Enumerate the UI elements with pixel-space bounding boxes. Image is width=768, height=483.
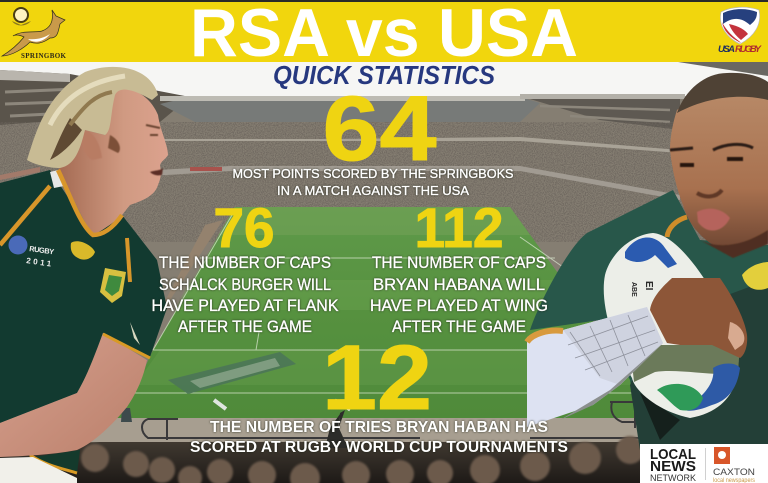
roof centre bbox=[160, 97, 540, 122]
player right: Bryan Habana: ABE bbox=[630, 282, 637, 297]
crowd bbox=[0, 430, 768, 483]
sleeve hem bbox=[103, 334, 150, 358]
stat: 76 caps: SCHALCK BURGER WILL bbox=[159, 276, 331, 294]
umpire silhouettes bbox=[121, 408, 132, 422]
cuff bbox=[527, 331, 563, 342]
pitch logo bbox=[168, 352, 296, 394]
header band bbox=[0, 0, 768, 62]
icon: rwc 2011 badge bbox=[8, 236, 55, 269]
collar bbox=[58, 170, 122, 235]
stat: 112 caps: 112 bbox=[414, 196, 504, 259]
logo: local news network and caxton: LOCAL bbox=[650, 446, 696, 463]
hand bbox=[650, 278, 747, 358]
arm bbox=[0, 333, 147, 457]
tier bands bbox=[160, 137, 680, 153]
stat: 112 caps: AFTER THE GAME bbox=[392, 318, 526, 336]
stat: 76 caps: THE NUMBER OF CAPS bbox=[159, 254, 331, 272]
icon: USA rugby logo: USA bbox=[718, 44, 735, 55]
jersey bbox=[0, 170, 167, 423]
head bbox=[670, 88, 768, 255]
collar bbox=[667, 217, 687, 237]
jersey bbox=[530, 190, 768, 483]
stat: 12 tries: THE NUMBER OF TRIES BRYAN HABAN HAS bbox=[210, 419, 548, 436]
ball text: EI bbox=[643, 281, 654, 291]
sleeve bbox=[527, 307, 663, 427]
logo: local news network and caxton: NEWS bbox=[650, 458, 696, 475]
stat: 112 caps: THE NUMBER OF CAPS bbox=[372, 254, 546, 272]
icon: USA rugby logo bbox=[718, 7, 763, 55]
icon: springbok crest bbox=[100, 268, 126, 303]
stat: 12 tries: 12 bbox=[322, 327, 432, 429]
stat: 64: MOST POINTS SCORED BY THE SPRINGBOKS bbox=[232, 167, 514, 181]
stands bbox=[0, 72, 768, 430]
stat: 64: 64 bbox=[322, 78, 436, 180]
player right: Bryan Habana bbox=[527, 73, 768, 483]
logo: local news network and caxton bbox=[640, 444, 768, 483]
stat: 76 caps: 76 bbox=[214, 196, 274, 259]
concrete walkway bbox=[60, 418, 660, 445]
stat: 12 tries bbox=[190, 327, 568, 456]
stat: 112 caps: HAVE PLAYED AT WING bbox=[370, 297, 548, 315]
canterbury logo bbox=[742, 262, 768, 290]
hair bbox=[677, 73, 768, 113]
logo: local news network and caxton: CAXTON bbox=[713, 467, 755, 477]
logo: local news network and caxton: NETWORK bbox=[650, 473, 696, 483]
stat: 112 caps: BRYAN HABANA WILL bbox=[373, 276, 545, 294]
pitch side strip bbox=[155, 220, 223, 320]
icon: USA rugby logo: RUGBY bbox=[735, 44, 763, 55]
roof left bbox=[0, 70, 190, 125]
facial features bbox=[670, 144, 753, 150]
icon: springbok logo bbox=[2, 8, 67, 60]
top right roof corner bbox=[678, 62, 768, 76]
white collar bbox=[50, 170, 64, 188]
roof right bbox=[520, 94, 680, 130]
icon: rwc 2011 badge: RUGBY bbox=[29, 244, 55, 256]
stat: 76 caps bbox=[152, 196, 338, 336]
pitchside flags bbox=[214, 400, 226, 409]
stat: 76 caps: AFTER THE GAME bbox=[178, 318, 312, 336]
rugby ball bbox=[604, 233, 739, 418]
icon: springbok logo: SPRINGBOK bbox=[21, 52, 67, 60]
hair bbox=[27, 67, 158, 168]
orange trims bbox=[0, 186, 50, 245]
heading: quick statistics: QUICK STATISTICS bbox=[273, 60, 496, 90]
stat: 64: IN A MATCH AGAINST THE USA bbox=[277, 184, 470, 198]
icon: rwc 2011 badge: 2011 bbox=[26, 256, 52, 269]
ear and face details bbox=[81, 131, 102, 160]
rails bbox=[142, 402, 650, 440]
speckle bbox=[0, 122, 768, 242]
icon: canterbury logo bbox=[71, 241, 95, 260]
shorts bbox=[0, 457, 77, 483]
stat: 64 bbox=[232, 78, 514, 198]
stat: 112 caps bbox=[370, 196, 548, 336]
player left: Schalk Burger bbox=[0, 67, 168, 483]
stat: 76 caps: HAVE PLAYED AT FLANK bbox=[152, 297, 338, 315]
hem bbox=[33, 450, 80, 473]
neck and face bbox=[58, 89, 168, 235]
pitch bbox=[80, 207, 660, 420]
stat: 12 tries: SCORED AT RUGBY WORLD CUP TOURNAMENTS bbox=[190, 439, 568, 456]
